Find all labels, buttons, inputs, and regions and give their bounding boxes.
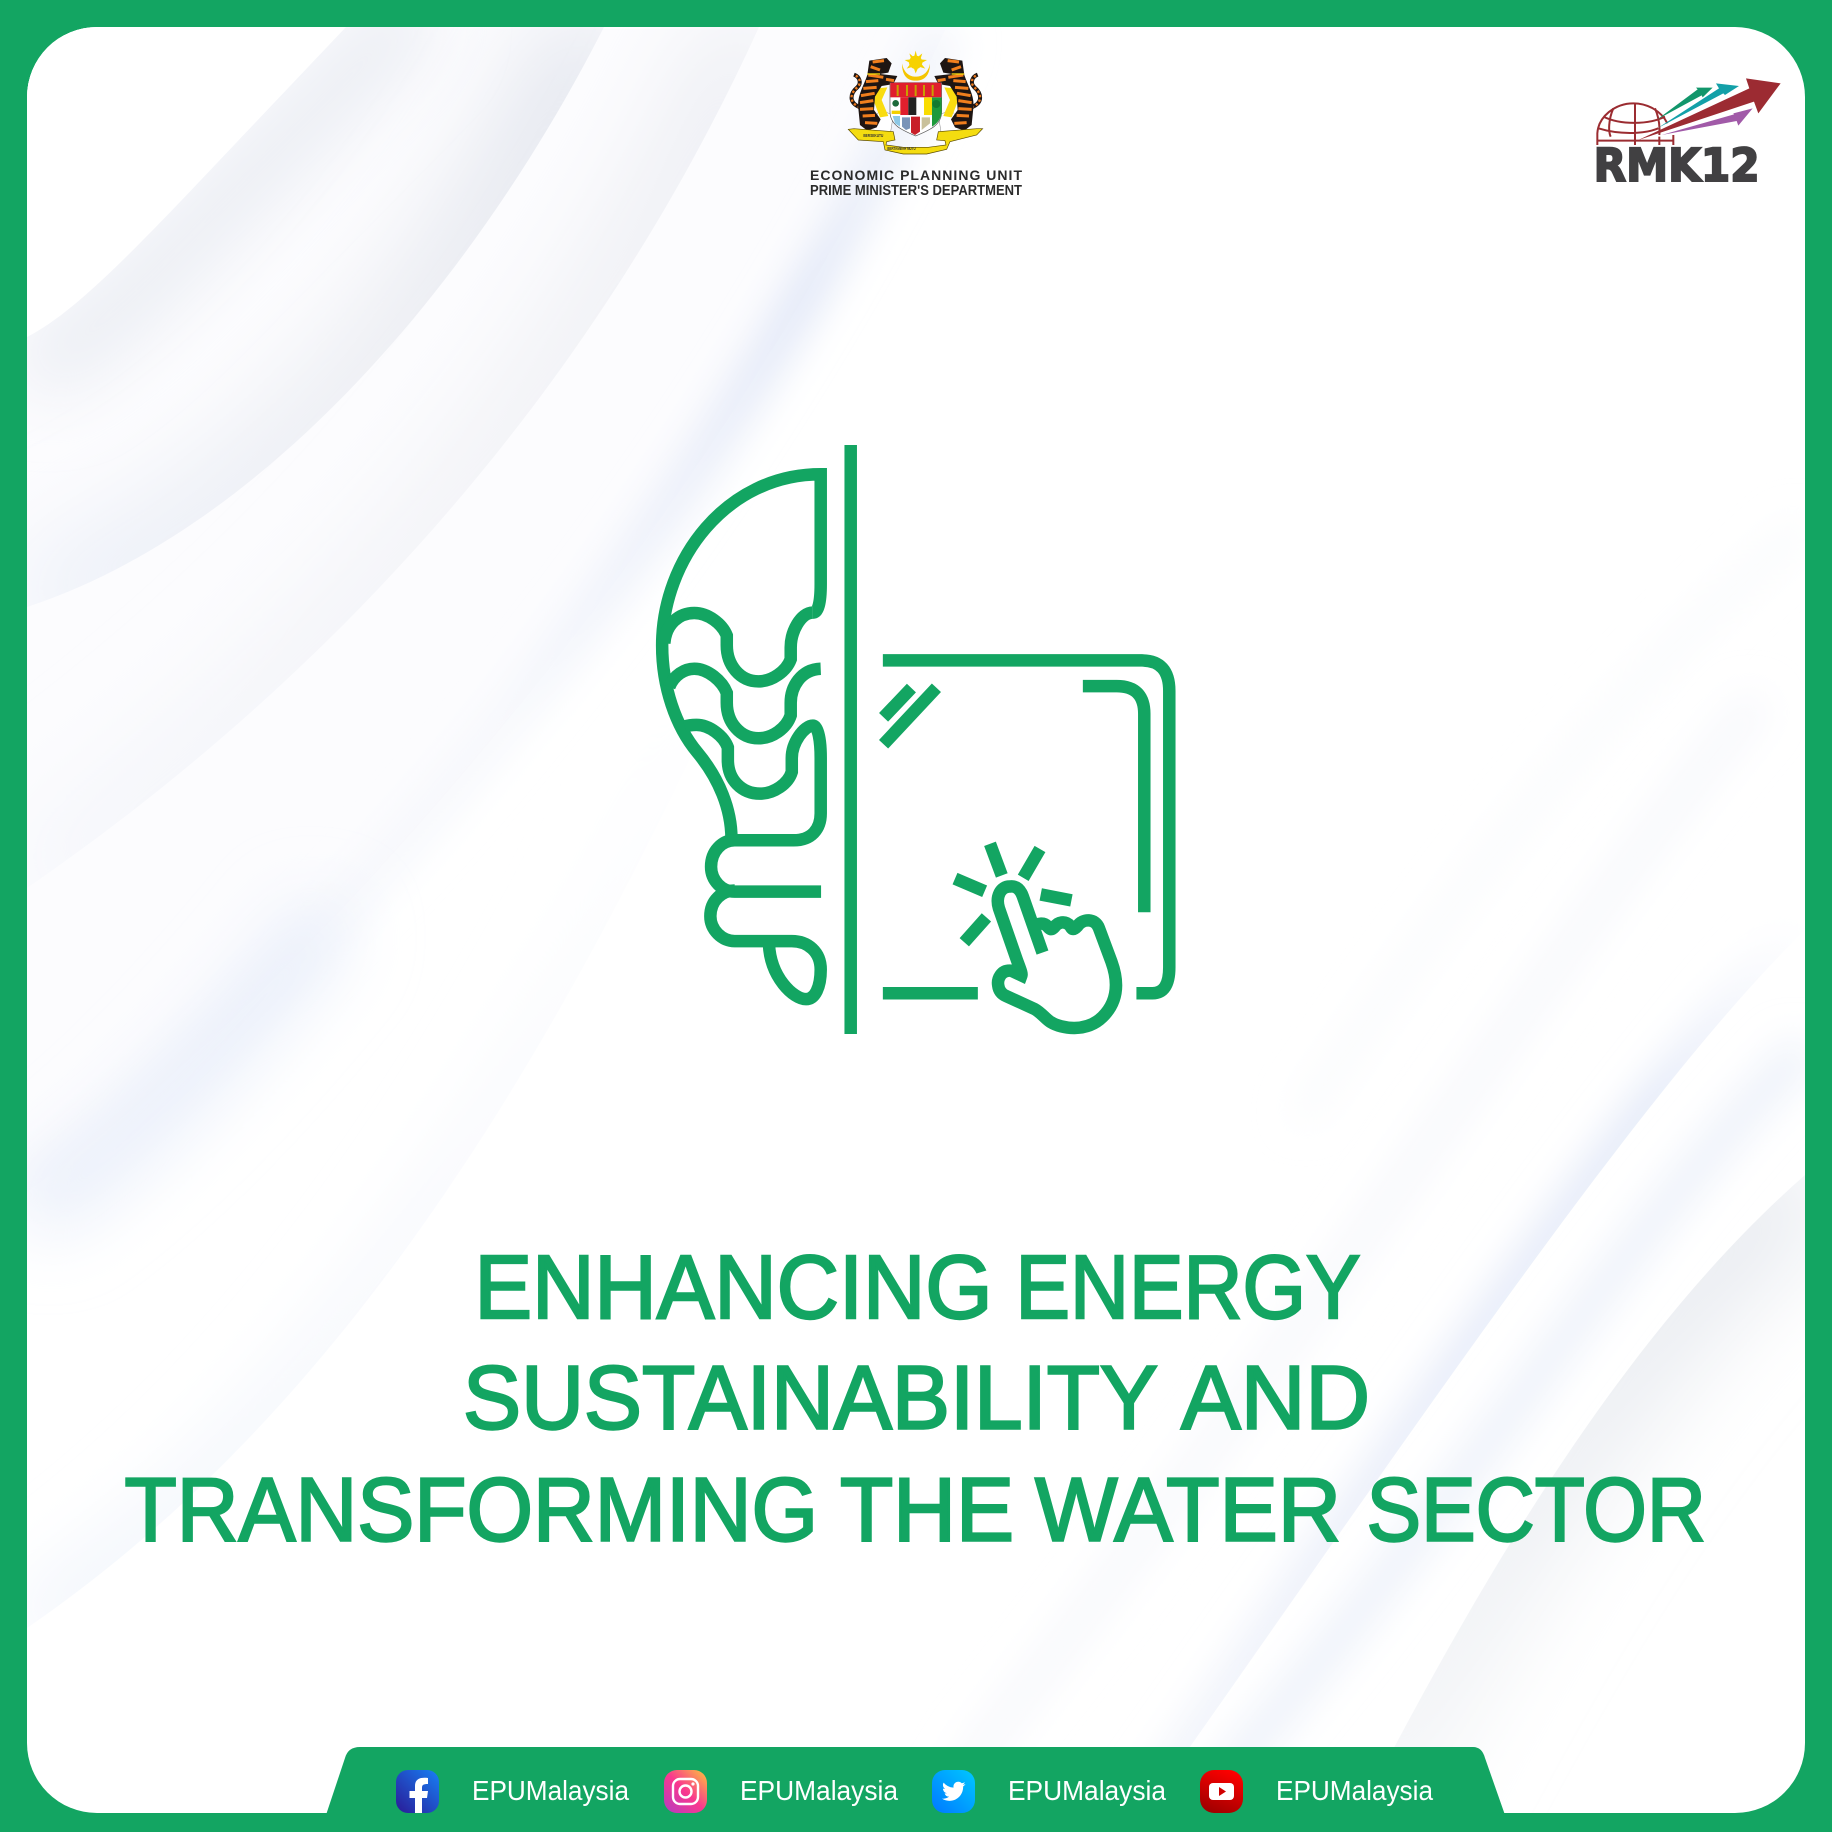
header text: Economic Planning Unit bbox=[810, 167, 1022, 199]
title: TRANSFORMING bbox=[124, 1460, 818, 1560]
icon: half light bulb bbox=[662, 474, 821, 999]
crest: left tiger bbox=[852, 58, 897, 136]
RMK12 logo: purple arrow bbox=[1662, 108, 1753, 135]
icon: centre divider bar bbox=[844, 445, 857, 1034]
crest: motto ribbon: BERTAMBAH MUTU bbox=[887, 146, 916, 151]
RMK12 logo: green arrow bbox=[1657, 88, 1713, 119]
youtube item bbox=[1200, 1770, 1433, 1813]
facebook item bbox=[396, 1770, 629, 1813]
icon: tablet outline bbox=[883, 660, 1169, 993]
twitter item: EPUMalaysia bbox=[1008, 1775, 1166, 1806]
twitter item bbox=[932, 1770, 1166, 1813]
title: WATER bbox=[1035, 1460, 1341, 1560]
RMK12 logo: teal arrow bbox=[1657, 83, 1739, 128]
facebook item: EPUMalaysia bbox=[472, 1775, 629, 1806]
RMK12 logo bbox=[1594, 78, 1781, 192]
title bbox=[124, 1238, 1706, 1560]
crest: crescent and star bbox=[902, 51, 930, 81]
crest: motto ribbon: BERSEKUTU bbox=[863, 133, 884, 138]
title: AND bbox=[1181, 1348, 1370, 1448]
title: SUSTAINABILITY bbox=[463, 1348, 1158, 1448]
header text: Economic Planning Unit: PRIME MINISTER'S DEPARTMENT bbox=[810, 182, 1022, 199]
instagram item: EPUMalaysia bbox=[740, 1775, 898, 1806]
title: ENHANCING bbox=[474, 1238, 992, 1338]
title: SECTOR bbox=[1366, 1460, 1706, 1560]
icon: pointing hand bbox=[998, 886, 1116, 1028]
youtube item: EPUMalaysia bbox=[1276, 1775, 1433, 1806]
RMK12 logo: red arrow bbox=[1638, 78, 1781, 140]
instagram item bbox=[664, 1770, 898, 1813]
crest: Malaysian coat of arms bbox=[848, 51, 983, 154]
crest: right tiger bbox=[934, 58, 980, 136]
icon: half light bulb and half tablet with pointing hand bbox=[662, 445, 1169, 1034]
RMK12 logo: globe bbox=[1597, 103, 1673, 145]
crest: shield bbox=[890, 83, 942, 136]
icon: tap rays bbox=[955, 844, 1071, 942]
RMK12 logo: wordmark: RMK12 bbox=[1594, 139, 1760, 192]
crest: motto ribbon bbox=[848, 129, 983, 154]
title: ENERGY bbox=[1016, 1238, 1360, 1338]
title: THE bbox=[840, 1460, 1014, 1560]
header text: Economic Planning Unit: ECONOMIC PLANNING UNIT bbox=[810, 167, 1022, 183]
social media bar bbox=[326, 1747, 1505, 1815]
